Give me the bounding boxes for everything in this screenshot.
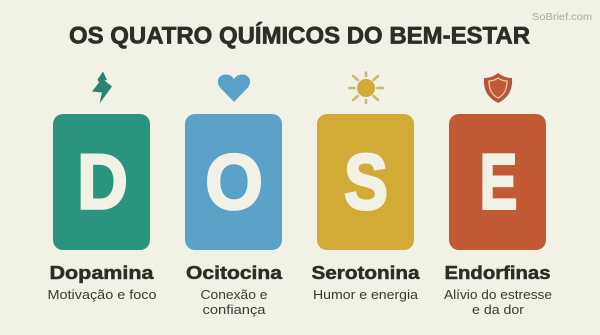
letter D: D xyxy=(77,138,128,225)
description: endorfinas xyxy=(444,287,552,317)
name: Serotonina: Serotonina xyxy=(312,263,421,283)
card: D xyxy=(53,114,150,250)
letter E: E xyxy=(480,138,517,226)
card: S xyxy=(317,114,414,250)
name: Dopamina: Dopamina xyxy=(50,263,155,283)
letter O: O xyxy=(205,139,263,226)
icon: shield xyxy=(484,73,512,103)
name: Ocitocina: Ocitocina xyxy=(186,263,283,283)
description: endorfinas: e da dor xyxy=(472,302,525,317)
icon: sun xyxy=(350,72,383,103)
panel: dopamina xyxy=(48,72,156,302)
description: ocitocina: confiança xyxy=(202,302,266,317)
title: OS QUATRO QUÍMICOS DO BEM-ESTAR xyxy=(69,22,530,50)
icon: heart xyxy=(218,74,250,102)
panel: endorfinas xyxy=(444,73,552,317)
icon: lightning bolt xyxy=(92,72,112,104)
watermark: SoBrief.com xyxy=(532,12,592,23)
description: serotonina: Humor e energia xyxy=(313,287,419,302)
card: E xyxy=(449,114,546,250)
panel: serotonina xyxy=(312,72,421,302)
description: endorfinas: Alívio do estresse xyxy=(444,287,552,302)
description: dopamina: Motivação e foco xyxy=(48,287,156,302)
description: ocitocina: Conexão e xyxy=(200,287,268,302)
letter S: S xyxy=(344,139,388,226)
panel: ocitocina xyxy=(185,74,283,317)
name: Endorfinas: Endorfinas xyxy=(444,263,550,283)
description: ocitocina xyxy=(200,287,268,317)
card: O xyxy=(185,114,282,250)
